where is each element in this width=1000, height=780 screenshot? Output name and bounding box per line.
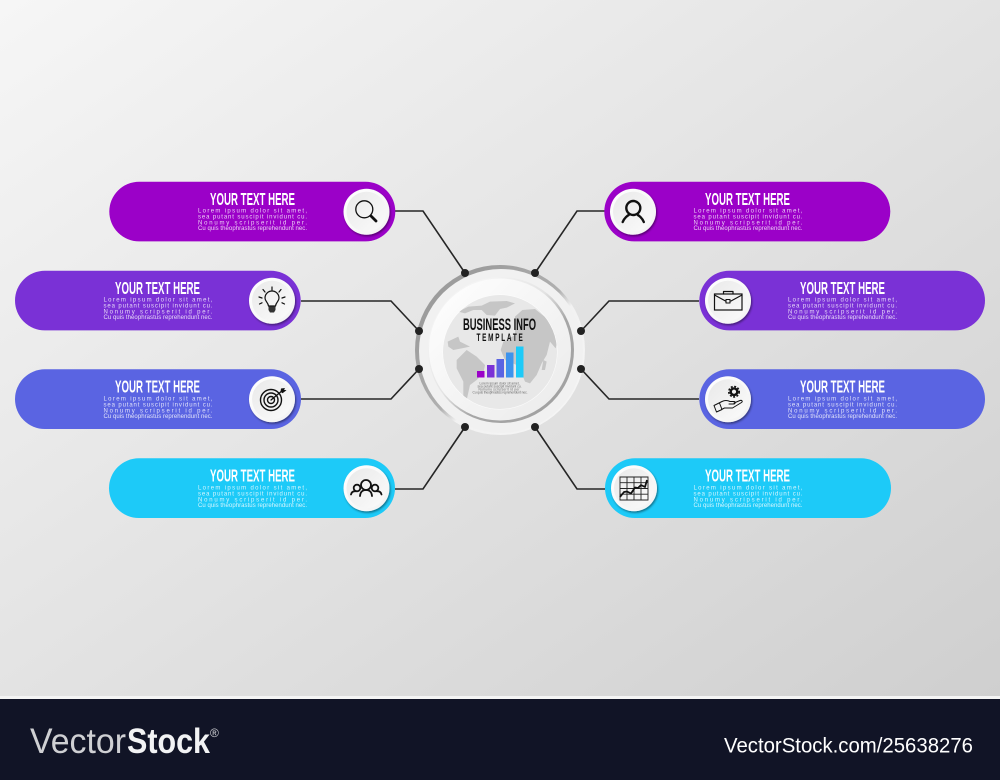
world map	[448, 301, 558, 400]
body text: Cu quis theophrastus reprehendunt nec.	[198, 503, 307, 509]
body text: Nonumy scripserit id per.	[198, 220, 307, 226]
body text: Lorem ipsum dolor sit amet,	[104, 298, 213, 304]
body text: Lorem ipsum dolor sit amet,	[788, 396, 897, 402]
bar chart	[477, 346, 524, 378]
panel: left 2 idea	[15, 271, 301, 330]
icon: target	[249, 376, 295, 422]
body text: Cu quis theophrastus reprehendunt nec.	[694, 503, 803, 509]
connector lines	[301, 211, 699, 489]
body text: sea putant suscipit invidunt cu.	[788, 402, 897, 408]
body text: Cu quis theophrastus reprehendunt nec.	[788, 315, 897, 321]
panel: right 4 chart	[605, 458, 891, 518]
body text: Nonumy scripserit id per.	[694, 498, 803, 504]
body text	[788, 396, 897, 420]
hub title: BUSINESS INFO	[463, 316, 536, 334]
panel: left 4 team	[109, 458, 395, 518]
body text: Lorem ipsum dolor sit amet,	[788, 298, 897, 304]
panel: right 3 service	[699, 369, 985, 429]
body text: Nonumy scripserit id per.	[788, 310, 897, 316]
panel: left 3 target	[15, 369, 301, 429]
heading: YOUR TEXT HERE	[705, 189, 790, 209]
icon: hand with gear	[705, 376, 751, 422]
logo: Stock	[127, 722, 210, 761]
hub caption: Lorem ipsum dolor sit amet,	[480, 382, 520, 386]
heading: YOUR TEXT HERE	[210, 189, 295, 209]
body text	[198, 486, 307, 509]
body text: Cu quis theophrastus reprehendunt nec.	[198, 226, 307, 232]
heading: YOUR TEXT HERE	[210, 466, 295, 486]
body text: Nonumy scripserit id per.	[104, 310, 213, 316]
hub caption: Nonumy scripserit id per.	[478, 388, 521, 392]
hub subtitle: TEMPLATE	[476, 332, 524, 344]
body text: Nonumy scripserit id per.	[788, 408, 897, 414]
body text	[104, 396, 213, 420]
body text: Nonumy scripserit id per.	[694, 220, 803, 226]
heading: YOUR TEXT HERE	[800, 377, 885, 397]
icon: line chart	[611, 465, 657, 511]
body text	[788, 298, 897, 321]
heading: YOUR TEXT HERE	[705, 466, 790, 486]
logo	[30, 722, 219, 761]
heading: YOUR TEXT HERE	[800, 278, 885, 298]
body text	[198, 208, 307, 232]
footer bar	[0, 696, 1000, 780]
hub caption: sea putant suscipit invidunt cu.	[478, 384, 522, 388]
body text: Cu quis theophrastus reprehendunt nec.	[104, 414, 213, 420]
logo: ®	[210, 726, 219, 740]
body text: Cu quis theophrastus reprehendunt nec.	[694, 226, 803, 232]
icon: briefcase	[705, 278, 751, 324]
heading: YOUR TEXT HERE	[115, 377, 200, 397]
image id: VectorStock.com/25638276	[724, 734, 973, 758]
body text: Lorem ipsum dolor sit amet,	[694, 208, 803, 214]
icon: magnifier	[344, 189, 390, 235]
panel: left 1 search	[109, 182, 395, 241]
body text: Nonumy scripserit id per.	[104, 408, 213, 414]
central hub	[415, 265, 585, 435]
body text: Nonumy scripserit id per.	[198, 498, 307, 504]
body text: sea putant suscipit invidunt cu.	[694, 492, 803, 498]
body text: Lorem ipsum dolor sit amet,	[694, 486, 803, 492]
icon: light bulb	[249, 278, 295, 324]
logo: Vector	[30, 722, 126, 761]
panel: right 2 briefcase	[699, 271, 985, 330]
heading: YOUR TEXT HERE	[115, 278, 200, 298]
body text: sea putant suscipit invidunt cu.	[198, 214, 307, 220]
body text: Lorem ipsum dolor sit amet,	[104, 396, 213, 402]
body text: sea putant suscipit invidunt cu.	[104, 402, 213, 408]
body text	[694, 208, 803, 232]
body text: Cu quis theophrastus reprehendunt nec.	[104, 315, 213, 321]
body text: Lorem ipsum dolor sit amet,	[198, 208, 307, 214]
body text	[104, 298, 213, 321]
panel: right 1 profile	[604, 182, 890, 241]
hub caption	[472, 382, 528, 394]
body text: Lorem ipsum dolor sit amet,	[198, 486, 307, 492]
body text: sea putant suscipit invidunt cu.	[104, 304, 213, 310]
body text: sea putant suscipit invidunt cu.	[788, 304, 897, 310]
body text: sea putant suscipit invidunt cu.	[694, 214, 803, 220]
icon: team	[344, 465, 390, 511]
hub caption: Cu quis theophrastus reprehendunt nec.	[472, 390, 528, 394]
icon: person	[610, 189, 656, 235]
body text: sea putant suscipit invidunt cu.	[198, 492, 307, 498]
body text	[694, 486, 803, 509]
connector dots	[415, 269, 585, 431]
body text: Cu quis theophrastus reprehendunt nec.	[788, 414, 897, 420]
